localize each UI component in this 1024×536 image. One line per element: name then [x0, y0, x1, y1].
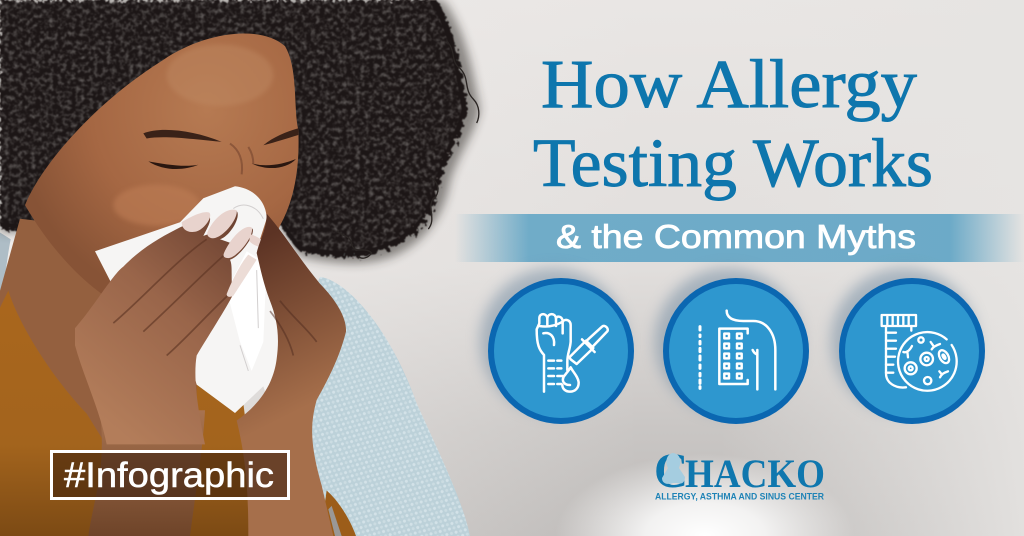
logo: Chacko Allergy, Asthma and Sinus Center — [654, 442, 825, 502]
fingernails — [182, 210, 268, 258]
icon: skin prick test circle — [480, 268, 631, 421]
icon: patch test on back circle — [655, 268, 806, 421]
title: How Allergy — [541, 46, 918, 122]
left hand — [75, 210, 268, 444]
forearm behind the tag — [88, 410, 205, 536]
tissue — [95, 186, 282, 422]
logo wordmark: C — [654, 442, 688, 498]
subtitle band: & the Common Myths — [556, 218, 916, 255]
face — [25, 33, 299, 314]
eyebrows — [143, 130, 222, 142]
neck — [0, 219, 200, 451]
photo: woman blowing her nose into a tissue — [0, 0, 480, 536]
title: Testing Works — [533, 125, 933, 201]
logo wordmark: HACKO — [685, 451, 825, 496]
tag: #Infographic — [52, 452, 288, 498]
mustard shirt — [0, 291, 356, 536]
logo lungs emblem — [662, 453, 685, 484]
right hand — [237, 214, 346, 536]
logo: Chacko Allergy, Asthma and Sinus Center: ALLERGY, ASTHMA AND SINUS CENTER — [655, 492, 824, 502]
sweater — [0, 232, 470, 536]
nose wrinkles — [230, 144, 253, 174]
closed eyes — [148, 161, 198, 169]
icon: blood test tube and petri dish circle — [831, 268, 982, 421]
tag: #Infographic: #Infographic — [64, 456, 274, 495]
logo wordmark — [654, 442, 825, 498]
title — [533, 46, 933, 201]
subtitle band — [455, 214, 1024, 262]
hair — [0, 0, 480, 263]
